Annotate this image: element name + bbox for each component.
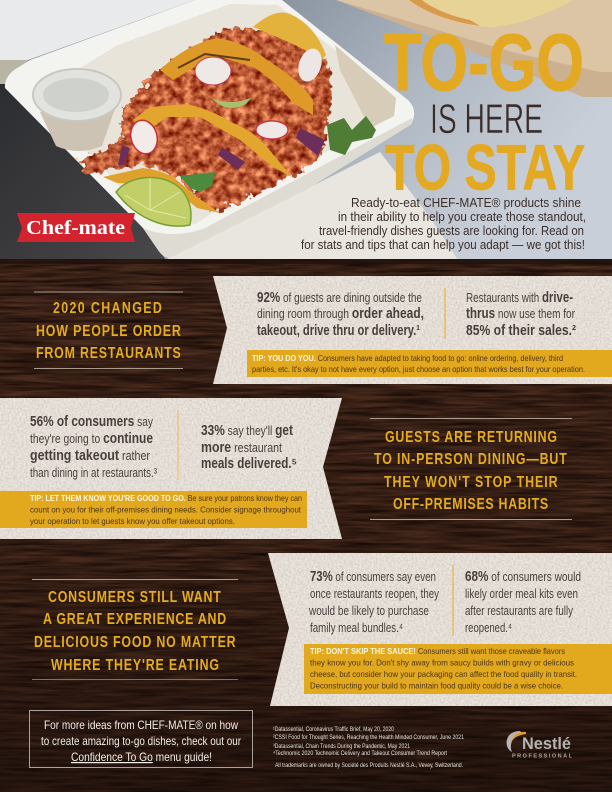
sauce cup xyxy=(33,69,121,151)
tray xyxy=(5,0,414,258)
stat: drive-thrus: Restaurants with drive- xyxy=(466,290,573,306)
stat: 68% of consumers xyxy=(465,569,581,635)
tip bar: good to go xyxy=(0,491,307,528)
callout: more ideas box xyxy=(30,710,252,768)
tip bar: don't skip the sauce xyxy=(304,644,612,694)
stat: 33% xyxy=(201,423,297,472)
hero photo: to-go tacos in a tray xyxy=(0,0,612,260)
tip bar: don't skip the sauce: cheese, but consider how your packaging can affect the food quality in transit. xyxy=(310,669,577,679)
stat: 56% of consumers: 56% of consumers say xyxy=(30,414,154,430)
logo: Nestlé Professional: Nestlé xyxy=(522,734,571,753)
footnotes: All trademarks are owned by Société des Produits Nestlé S.A., Vevey, Switzerland. xyxy=(275,763,463,769)
footnotes: ²CSSI Food for Thought Series, Reaching the Health Minded Consumer, June 2021 xyxy=(273,735,465,741)
panel: consumers heading: A GREAT EXPERIENCE AND xyxy=(43,610,226,627)
logo: Nestlé Professional: PROFESSIONAL xyxy=(512,754,573,760)
stat: 56% of consumers: getting takeout rather xyxy=(30,448,150,464)
cilantro and lime xyxy=(116,97,376,226)
logo: Chef-mate: Chef-mate xyxy=(26,217,125,239)
radishes xyxy=(195,57,231,85)
stat: 68% of consumers: 68% of consumers would xyxy=(465,569,581,585)
tip bar: good to go: TIP: LET THEM KNOW YOU'RE GOOD TO GO. Be sure your patrons know they can xyxy=(30,493,302,503)
front tortilla xyxy=(133,104,292,177)
intro text xyxy=(301,195,586,252)
tip bar: don't skip the sauce: TIP: DON'T SKIP THE SAUCE! Consumers still want those craveable flavors xyxy=(310,646,565,656)
lower tortilla xyxy=(103,168,220,213)
stat: 56% of consumers xyxy=(30,414,157,480)
panel: guests returning heading: THEY WON'T STOP THEIR xyxy=(384,473,558,490)
tip bar: don't skip the sauce: Deconstructing your build to maintain food quality could be a wise choice. xyxy=(310,680,563,690)
panel: 2020 heading: HOW PEOPLE ORDER xyxy=(36,322,181,339)
taco filling xyxy=(80,28,332,212)
stat: drive-thrus: thrus now use them for xyxy=(466,306,575,322)
tip bar: you do you: TIP: YOU DO YOU. Consumers have adapted to taking food to go: online ordering, delivery, third xyxy=(252,353,563,363)
lid xyxy=(0,0,195,60)
tip bar: don't skip the sauce: they know you for. Don't shy away from saucy builds with gravy or delicious xyxy=(310,658,574,668)
stat: 68% of consumers: after restaurants are fully xyxy=(465,604,574,618)
panel: guests returning heading: OFF-PREMISES HABITS xyxy=(393,495,548,512)
cutting board xyxy=(336,0,612,97)
callout: more ideas box: For more ideas from CHEF-MATE® on how xyxy=(44,718,238,732)
stat: 73% of consumers: 73% of consumers say even xyxy=(310,569,436,585)
stat: 92% of guests xyxy=(257,290,424,339)
panel: 56% banner xyxy=(0,398,342,539)
panel: 92% banner xyxy=(213,276,612,384)
tip bar: good to go: your operation to let guests know you offer takeout options. xyxy=(30,516,235,526)
title xyxy=(384,18,585,204)
slate surface xyxy=(0,84,166,260)
back tortilla xyxy=(253,13,326,62)
panel: 73% banner xyxy=(268,553,612,706)
stat: 73% of consumers: family meal bundles.⁴ xyxy=(310,621,403,635)
logo: Chef-mate xyxy=(17,213,135,242)
footnotes: ⁴Technomic 2020 Technomic Delivery and Takeout Consumer Trend Report xyxy=(273,750,447,757)
stat: 33%: 33% say they'll get xyxy=(201,423,293,439)
stat: drive-thrus: 85% of their sales.² xyxy=(466,323,576,339)
callout: more ideas box: to create amazing to-go dishes, check out our xyxy=(41,734,241,748)
panel: consumers heading: DELICIOUS FOOD NO MATTER xyxy=(34,633,236,650)
towel xyxy=(165,152,458,260)
logo: Nestlé Professional xyxy=(507,731,573,760)
panel: guests returning heading: GUESTS ARE RETURNING xyxy=(385,428,557,445)
intro text: in their ability to help you create those standout, xyxy=(338,209,586,224)
stat: 68% of consumers: reopened.⁴ xyxy=(465,621,512,635)
panel: consumers heading: WHERE THEY'RE EATING xyxy=(51,656,219,673)
panel: 2020 heading xyxy=(34,292,183,369)
stat: 73% of consumers: once restaurants reopen, they xyxy=(310,587,440,601)
stat: 92% of guests: 92% of guests are dining outside the xyxy=(257,290,422,306)
intro text: Ready-to-eat CHEF-MATE® products shine xyxy=(351,195,581,210)
panel: 2020 heading: 2020 CHANGED xyxy=(53,299,162,316)
footnotes: ³Datassential, Chain Trends During the Pandemic, May 2021 xyxy=(273,744,411,750)
title: IS HERE xyxy=(430,95,543,142)
footnotes xyxy=(273,727,465,769)
panel: guests returning heading xyxy=(370,418,572,520)
tip bar: you do you xyxy=(247,350,612,377)
stat: 56% of consumers: they're going to continue xyxy=(30,431,153,447)
footnotes: ¹Datassential, Coronavirus Traffic Brief, May 20, 2020 xyxy=(273,727,395,733)
stat: 56% of consumers: than dining in at restaurants.³ xyxy=(30,466,157,480)
callout: more ideas box: Confidence To Go menu guide! xyxy=(71,750,212,764)
stat: 33%: more restaurant xyxy=(201,440,282,456)
panel: 2020 heading: FROM RESTAURANTS xyxy=(36,344,181,361)
panel: consumers heading: CONSUMERS STILL WANT xyxy=(48,588,221,605)
stat: 33%: meals delivered.⁵ xyxy=(201,456,297,472)
stat: drive-thrus xyxy=(466,290,576,339)
stat: 92% of guests: dining room through order ahead, xyxy=(257,306,424,322)
stat: 73% of consumers xyxy=(308,569,440,635)
purple cabbage xyxy=(118,128,325,170)
middle tortilla xyxy=(160,38,313,115)
stat: 73% of consumers: would be likely to purchase xyxy=(308,604,429,618)
wood background xyxy=(0,259,612,792)
stat: 68% of consumers: likely order meal kits even xyxy=(465,587,578,601)
panel: consumers heading xyxy=(32,579,238,680)
panel: guests returning heading: TO IN-PERSON DINING—BUT xyxy=(374,450,567,467)
stat: 92% of guests: takeout, drive thru or delivery.¹ xyxy=(257,323,420,339)
tip bar: good to go: count on you for their off-premises dining needs. Consider signage throughout xyxy=(30,504,302,514)
